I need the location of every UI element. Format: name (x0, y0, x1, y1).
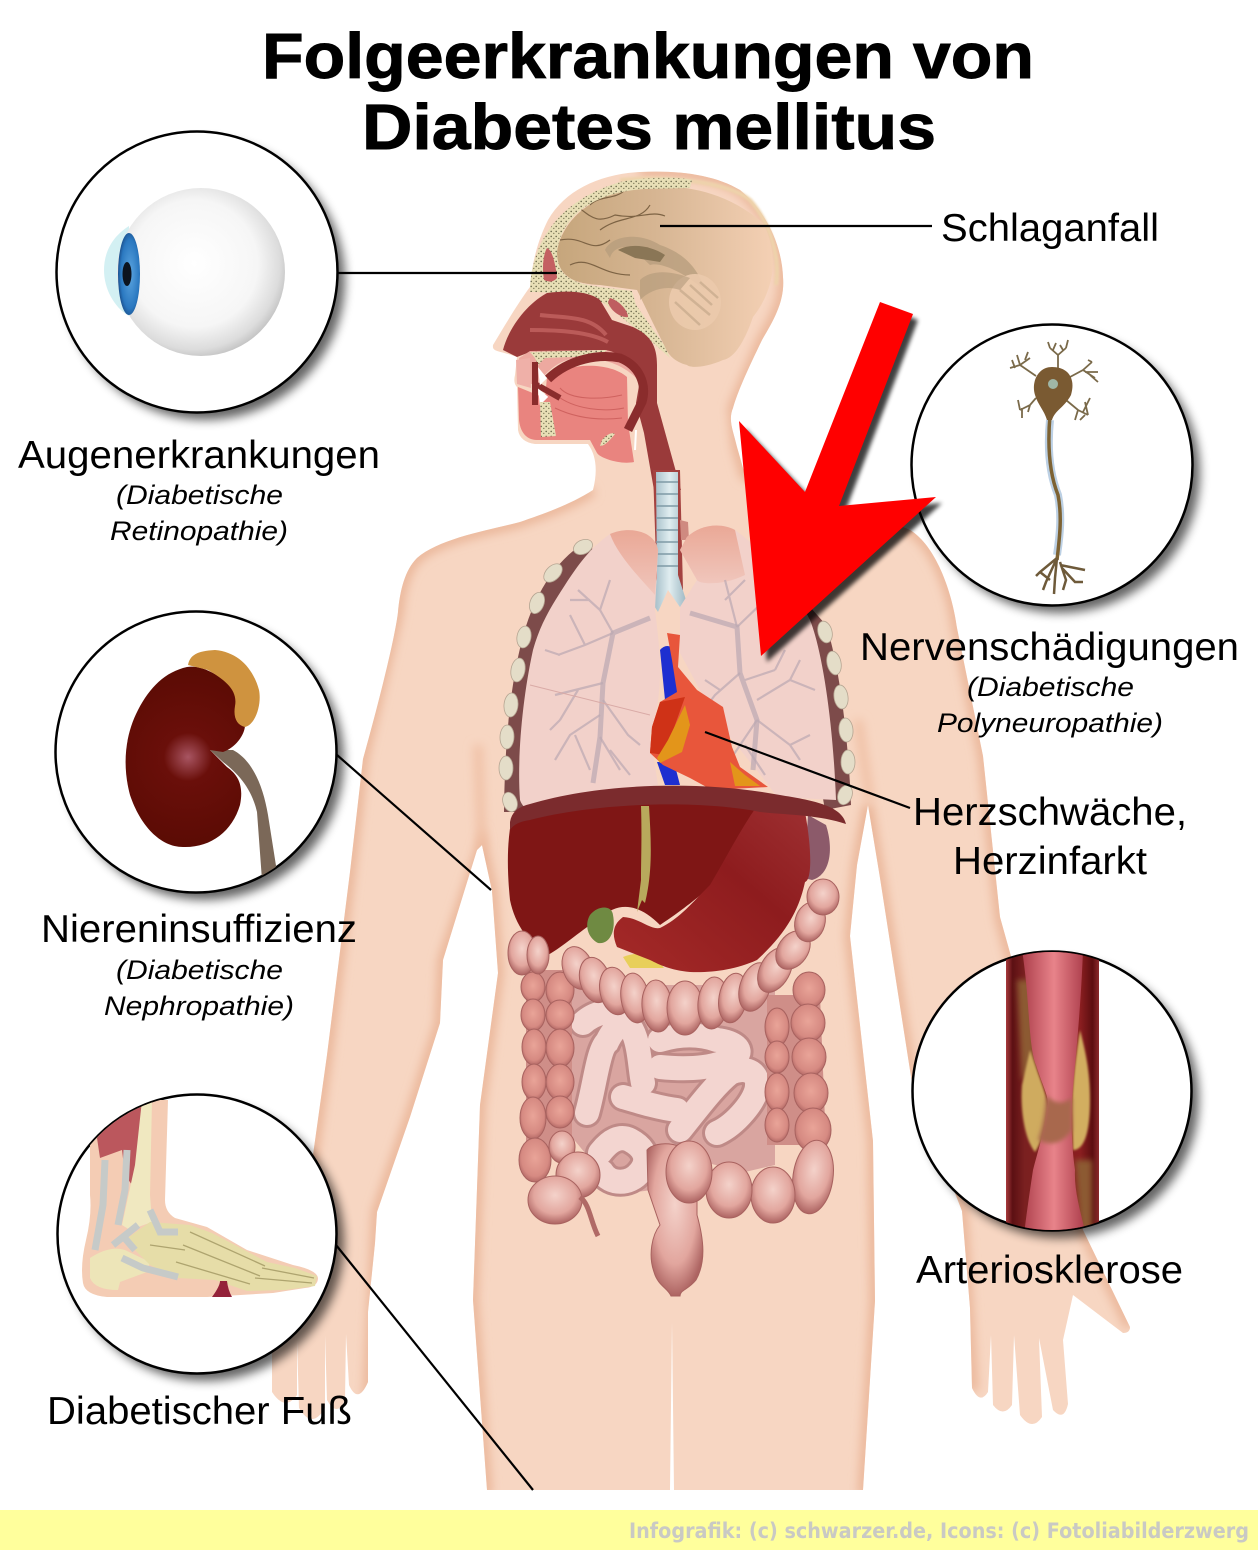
heart (650, 633, 768, 790)
line: kidney (337, 755, 491, 890)
label: Nervenschaedigungen: Nervenschädigungen (860, 626, 1239, 669)
ascending colon (519, 972, 574, 1182)
ulcer (212, 1281, 232, 1297)
stomach (614, 805, 810, 972)
teeth (540, 372, 546, 402)
label: Herzschwaeche, Herzinfarkt: Herzinfarkt (953, 840, 1147, 883)
ribs beads (499, 536, 855, 814)
icon: kidney (126, 650, 277, 880)
connector lines (336, 226, 932, 1490)
transverse colon (508, 931, 536, 975)
foot muscles (97, 1100, 145, 1185)
tongue and floor of mouth (518, 366, 634, 463)
gallbladder (587, 908, 614, 943)
tendons (95, 1150, 178, 1277)
line: eye (338, 272, 557, 274)
label: Augenerkrankungen: Retinopathie) (110, 516, 288, 546)
small intestine (566, 985, 775, 1192)
label: Nervenschaedigungen: (Diabetische (967, 672, 1134, 702)
label: Niereninsuffizienz (41, 908, 357, 1021)
bile duct (637, 806, 651, 912)
panel: foot circle (58, 1094, 344, 1381)
jaw bone (540, 402, 556, 437)
label: Augenerkrankungen (18, 434, 380, 546)
panel: kidney circle (56, 612, 344, 900)
label: Herzschwaeche, Herzinfarkt (913, 791, 1187, 883)
icon: neuron (1010, 340, 1098, 594)
spleen (804, 815, 830, 880)
right lung (680, 526, 836, 800)
tibia (122, 1100, 152, 1230)
foot skin (82, 1100, 318, 1297)
label: Diabetischer Fuss: Diabetischer Fuß (47, 1390, 352, 1433)
label: Nervenschaedigungen: Polyneuropathie) (937, 708, 1163, 738)
skull bone (530, 178, 692, 358)
label: Niereninsuffizienz: Nephropathie) (104, 991, 294, 1021)
title: Folgeerkrankungen von (262, 20, 1034, 92)
large intestine (508, 879, 839, 1296)
brain (557, 179, 777, 367)
rectum (647, 1144, 703, 1296)
line: foot (336, 1245, 533, 1490)
title: Diabetes mellitus (362, 91, 936, 163)
bronchial trees (593, 613, 757, 783)
foot bones (90, 1249, 150, 1290)
head interior: skull, brain, airway (503, 178, 777, 490)
colon backing (526, 970, 826, 1160)
sphenoid sinus (608, 298, 628, 317)
panel: eye circle (56, 132, 345, 420)
label: Schlaganfall: Schlaganfall (941, 207, 1159, 250)
icon: artery with plaque (1006, 950, 1099, 1235)
panel: neuron circle (912, 324, 1200, 613)
label: Augenerkrankungen: (Diabetische (116, 480, 283, 510)
lips (535, 362, 560, 405)
body silhouette (260, 165, 1140, 1500)
red arrow (739, 302, 942, 662)
label: Nervenschaedigungen (860, 626, 1239, 738)
label: Arteriosklerose: Arteriosklerose (916, 1249, 1183, 1292)
pancreas (623, 954, 664, 968)
panel: artery circle (912, 950, 1199, 1238)
title (262, 20, 1034, 163)
label: Niereninsuffizienz: (Diabetische (116, 955, 283, 985)
diaphragm (510, 786, 846, 830)
trachea and esophagus (653, 470, 689, 612)
icon: eyeball (104, 188, 285, 356)
rib bands (504, 540, 851, 812)
label: Augenerkrankungen: Augenerkrankungen (18, 434, 380, 477)
lungs and ribs (499, 526, 855, 814)
descending colon (765, 972, 831, 1152)
liver (508, 801, 757, 955)
palate (519, 350, 644, 385)
label: Herzschwaeche, Herzinfarkt: Herzschwäche, (913, 791, 1187, 834)
cecum and appendix (549, 1131, 575, 1163)
line: stroke (660, 225, 932, 227)
sigmoid bottom (788, 1138, 838, 1216)
line: heart (705, 732, 910, 808)
label: Niereninsuffizienz: Niereninsuffizienz (41, 908, 357, 951)
frontal sinus (543, 248, 557, 282)
icon: foot (82, 1100, 318, 1297)
mouth canal (548, 357, 644, 430)
footer band (0, 1510, 1258, 1550)
left lung (519, 530, 660, 812)
nasal cavity and pharynx (503, 292, 681, 490)
